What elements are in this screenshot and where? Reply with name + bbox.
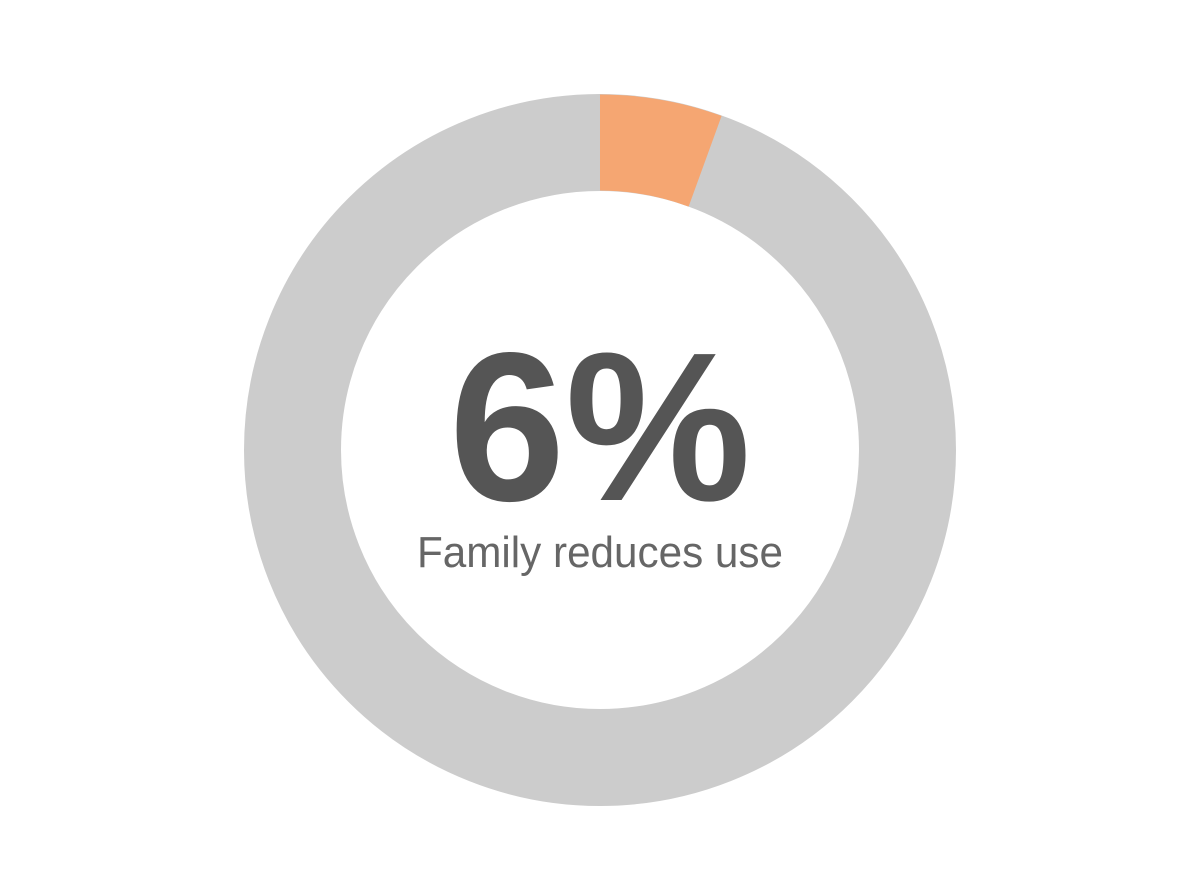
big percentage: 6% — [449, 308, 751, 545]
caption: Family reduces use — [417, 528, 783, 577]
donut segment: 6% family reduces use — [600, 94, 722, 207]
donut ring: remainder — [292, 142, 908, 758]
center label — [417, 308, 783, 577]
